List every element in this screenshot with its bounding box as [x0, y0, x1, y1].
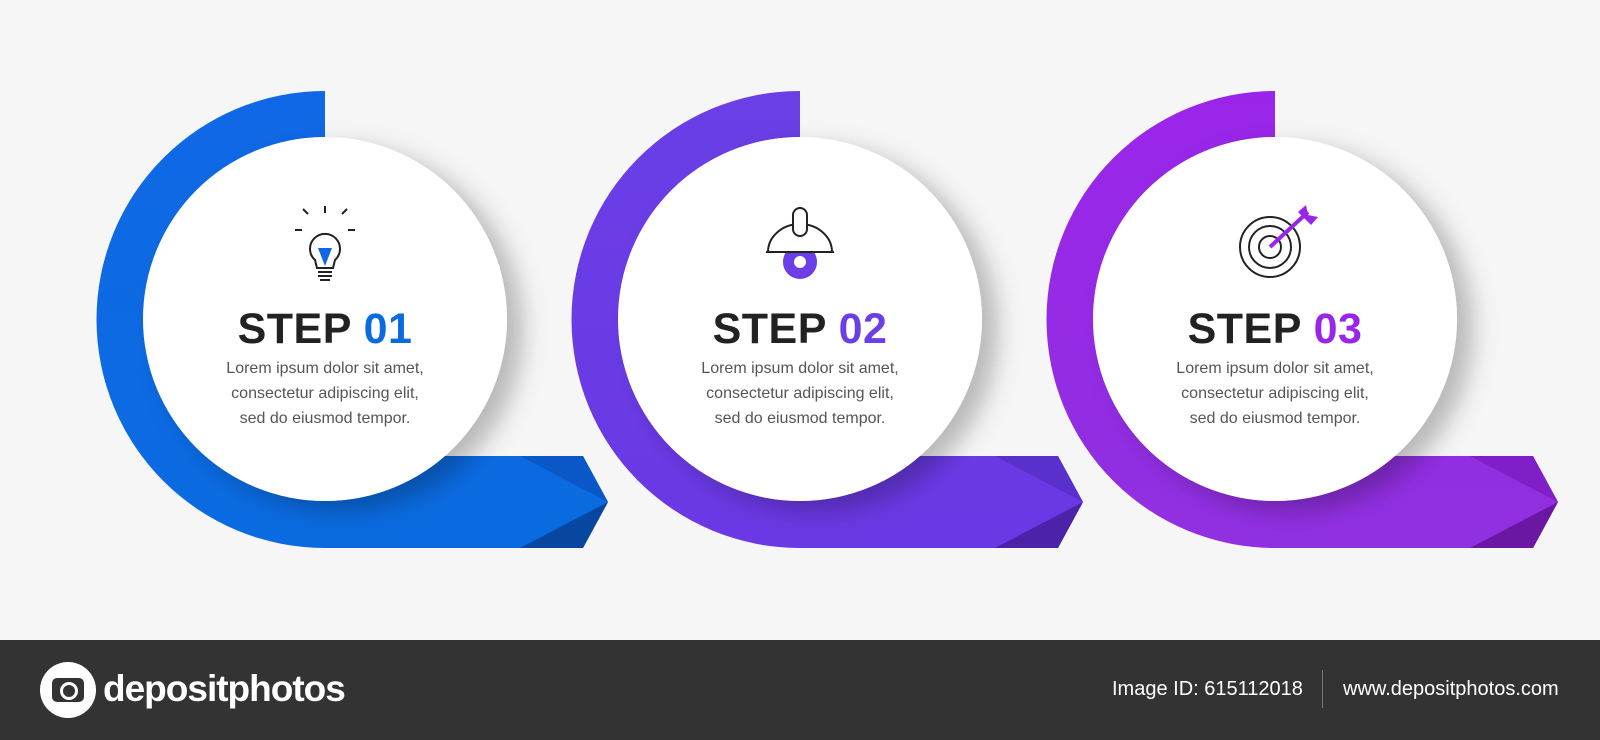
icon: light bulb [295, 206, 355, 280]
step 3 text [1176, 360, 1374, 427]
step 1 text: consectetur adipiscing elit, [231, 385, 419, 402]
icon: target [1240, 205, 1318, 277]
footer bar [0, 640, 1600, 740]
step 2 text: sed do eiusmod tempor. [715, 410, 885, 427]
image id: Image ID: 615112018 [1112, 678, 1303, 700]
step 1 text [226, 360, 424, 427]
step 1 circle [143, 137, 507, 501]
step 2 text [701, 360, 899, 427]
step 2 circle [618, 137, 982, 501]
icon: helmet gear [766, 208, 834, 278]
step 2 ribbon [572, 91, 1083, 548]
step 2 heading: STEP 02 [713, 305, 887, 353]
step 3 circle [1093, 137, 1457, 501]
url: www.depositphotos.com [1343, 678, 1559, 700]
step 1 text: Lorem ipsum dolor sit amet, [226, 360, 424, 377]
step 1 heading: STEP 01 [238, 305, 412, 353]
step 3 heading: STEP 03 [1188, 305, 1362, 353]
logo: depositphotos [103, 668, 345, 709]
step 3 text: consectetur adipiscing elit, [1181, 385, 1369, 402]
step 3 ribbon [1046, 91, 1558, 548]
logo [40, 662, 345, 718]
step 2 text: consectetur adipiscing elit, [706, 385, 894, 402]
step 1 ribbon [97, 91, 608, 548]
step 3 text: sed do eiusmod tempor. [1190, 410, 1360, 427]
step 1 text: sed do eiusmod tempor. [240, 410, 410, 427]
step 2 text: Lorem ipsum dolor sit amet, [701, 360, 899, 377]
step 3 text: Lorem ipsum dolor sit amet, [1176, 360, 1374, 377]
